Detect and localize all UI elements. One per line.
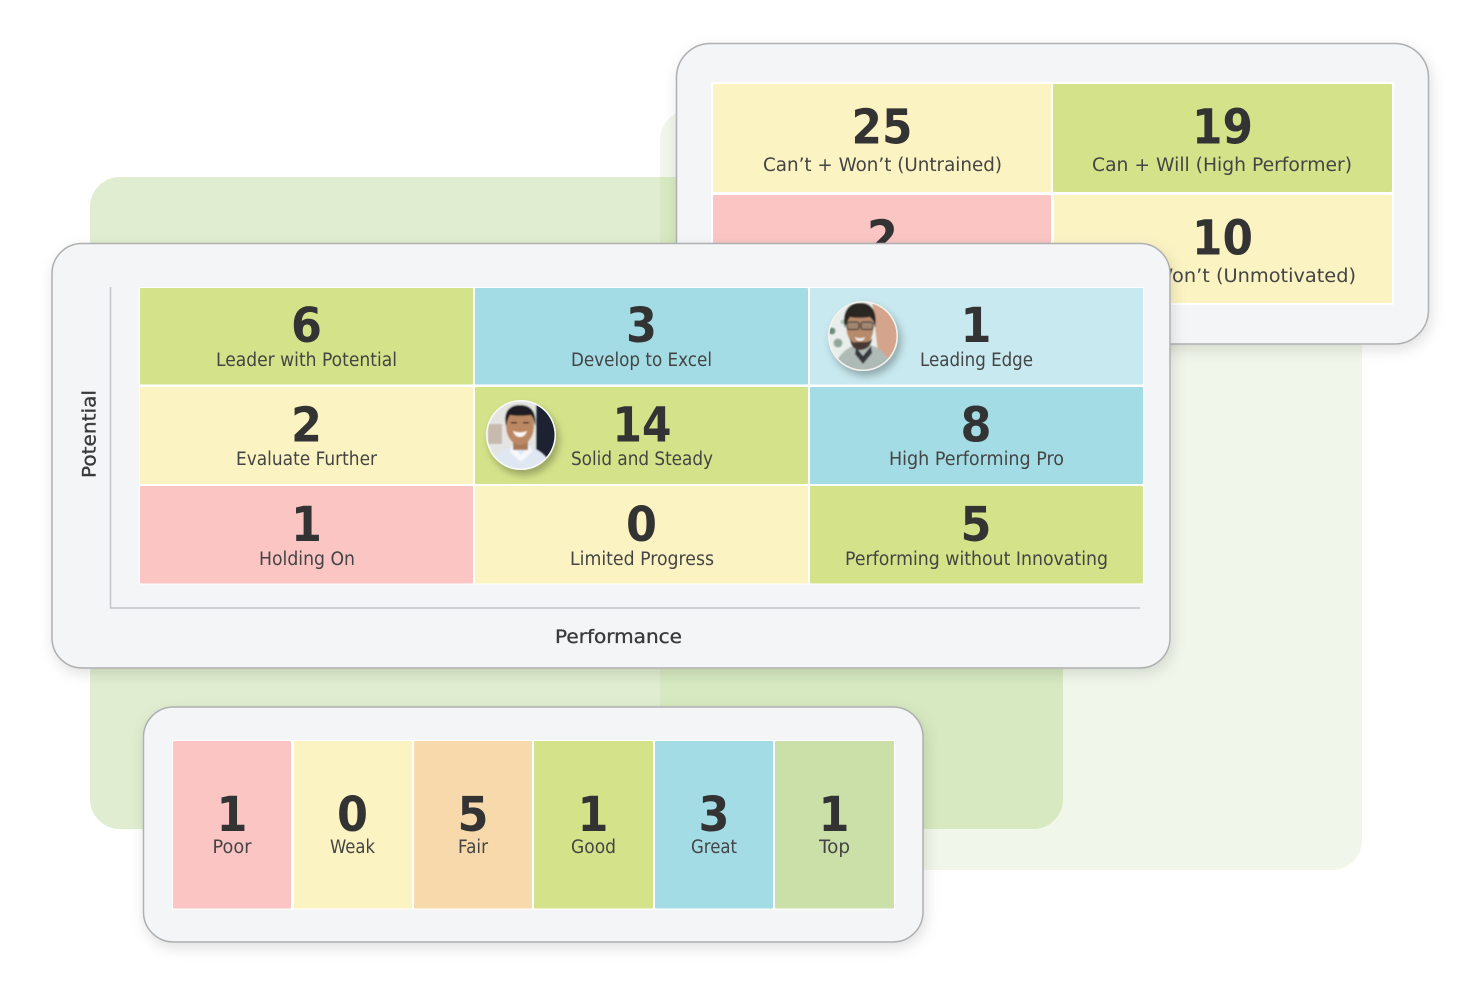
- cell: evaluate further: 2: [291, 398, 322, 454]
- cell: solid and steady: 14: [612, 398, 672, 454]
- cell: good: 1: [578, 787, 608, 843]
- axis label: potential: Potential: [78, 390, 100, 478]
- cell: unmotivated: Can + Won’t (Unmotivated): [1088, 266, 1356, 287]
- cell: weak: 0: [337, 787, 368, 843]
- cell: develop to excel: Develop to Excel: [571, 350, 712, 371]
- cell: solid and steady: [475, 387, 808, 484]
- cell: weak: Weak: [330, 837, 375, 858]
- cell: good: Good: [571, 837, 616, 858]
- icon: avatar smiling man: [486, 400, 558, 472]
- cell: poor: [173, 741, 291, 908]
- icon: avatar with glasses: [828, 300, 900, 372]
- cell: holding on: [140, 486, 473, 584]
- cell: high performing pro: [810, 387, 1143, 484]
- background panel overlap: [660, 177, 1063, 829]
- cell: fair: 5: [458, 787, 488, 843]
- cell: develop to excel: 3: [626, 298, 657, 354]
- cell: top: [775, 741, 894, 908]
- axis lines: [110, 287, 1140, 608]
- cell: holding on: 1: [291, 497, 322, 553]
- cell: good: [534, 741, 653, 908]
- cell: leading edge: Leading Edge: [920, 350, 1033, 371]
- cell: leader with potential: 6: [291, 298, 322, 354]
- background panel: green: [90, 177, 1063, 829]
- cell: holding on: Holding On: [259, 549, 355, 570]
- cell: fair: Fair: [458, 837, 488, 858]
- cell: unmotivated: 10: [1192, 210, 1253, 266]
- cell: limited progress: 0: [626, 497, 657, 553]
- cell: misplaced: 2: [867, 210, 898, 266]
- cell: develop to excel: [475, 288, 808, 384]
- cell: high performer: 19: [1192, 100, 1253, 156]
- cell: performing without innovating: Performing without Innovating: [845, 549, 1108, 570]
- cell: untrained: 25: [852, 100, 912, 156]
- cell: great: [655, 741, 773, 908]
- axis label: performance: Performance: [555, 626, 682, 648]
- background panel: light green: [660, 110, 1362, 870]
- panel: can and will matrix: [676, 44, 1428, 344]
- cell: high performing pro: High Performing Pro: [889, 449, 1064, 470]
- cell: evaluate further: Evaluate Further: [236, 449, 377, 470]
- cell: great: Great: [691, 837, 737, 858]
- cell: evaluate further: [140, 387, 473, 484]
- cell: fair: [414, 741, 532, 908]
- cell: high performer: Can + Will (High Performer): [1092, 155, 1352, 176]
- cell: leader with potential: Leader with Potential: [216, 350, 397, 371]
- cell: leading edge: [810, 288, 1143, 384]
- cell: top: Top: [818, 837, 850, 858]
- cell: unmotivated: [1054, 195, 1392, 303]
- cell: limited progress: Limited Progress: [570, 549, 714, 570]
- cell: high performing pro: 8: [960, 398, 992, 454]
- cell: performing without innovating: [810, 486, 1143, 584]
- cell: poor: 1: [216, 787, 248, 843]
- cell: weak: [294, 741, 412, 908]
- cell: limited progress: [475, 486, 808, 584]
- panel: nine box grid: [52, 244, 1170, 668]
- cell: untrained: Can’t + Won’t (Untrained): [763, 155, 1002, 176]
- cell: untrained: [713, 84, 1051, 192]
- cell: leading edge: 1: [960, 298, 992, 354]
- cell: top: 1: [818, 787, 850, 843]
- cell: performing without innovating: 5: [960, 497, 992, 553]
- panel: rating distribution: [144, 707, 923, 942]
- cell: leader with potential: [140, 288, 473, 384]
- cell: solid and steady: Solid and Steady: [571, 449, 713, 470]
- cell: poor: Poor: [212, 837, 252, 858]
- cell: great: 3: [698, 787, 730, 843]
- cell: high performer: [1053, 84, 1392, 192]
- cell: misplaced: [713, 195, 1051, 303]
